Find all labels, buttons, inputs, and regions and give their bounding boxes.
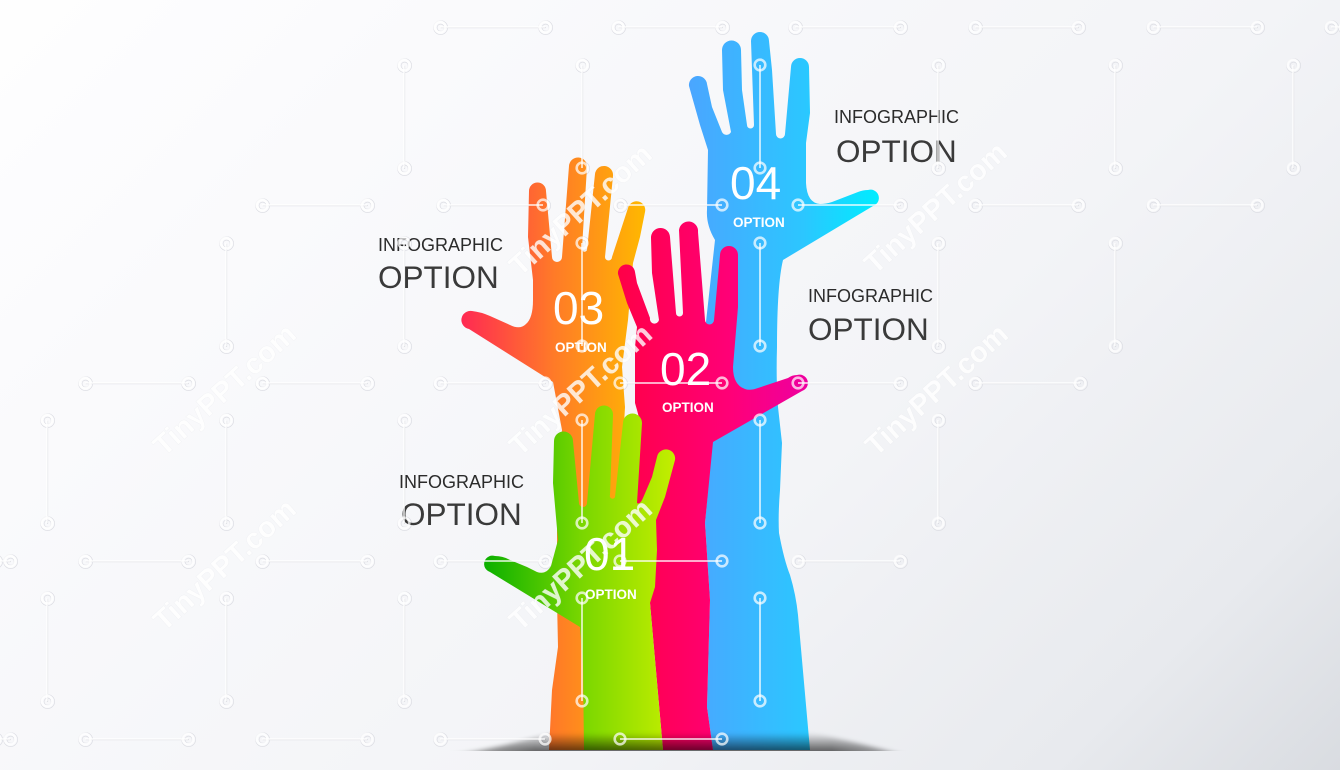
number badge 02: OPTION: [662, 400, 714, 415]
label block: option 02: INFOGRAPHIC: [808, 286, 933, 306]
watermarks: TinyPPT.com: [147, 493, 303, 637]
number badge 03: [553, 282, 607, 355]
label block: option 01: OPTION: [401, 496, 522, 532]
watermarks: TinyPPT.com: [858, 136, 1014, 280]
watermarks: TinyPPT.com: [859, 318, 1015, 462]
watermarks: [147, 136, 1015, 637]
number badge 04: OPTION: [733, 215, 785, 230]
label block: option 04: [834, 107, 959, 169]
label block: option 03: INFOGRAPHIC: [378, 235, 503, 255]
number badge 02: [660, 343, 714, 415]
watermarks: TinyPPT.com: [147, 318, 303, 462]
hand 01: green: [484, 406, 675, 750]
number badge 01: OPTION: [585, 587, 637, 602]
label block: option 04: OPTION: [836, 133, 957, 169]
hand 03: orange: [461, 157, 645, 750]
number badge 02: 02: [660, 343, 711, 395]
label block: option 03: [378, 235, 503, 295]
label block: option 01: [399, 472, 524, 532]
hand 02: pink: [618, 221, 808, 750]
watermarks: TinyPPT.com: [503, 318, 659, 462]
label block: option 02: [808, 286, 933, 347]
number badge 04: 04: [730, 157, 781, 209]
label block: option 01: INFOGRAPHIC: [399, 472, 524, 492]
label block: option 04: INFOGRAPHIC: [834, 107, 959, 127]
ground shadow: [462, 734, 898, 751]
label block: option 02: OPTION: [808, 311, 929, 347]
label block: option 03: OPTION: [378, 259, 499, 295]
watermarks: TinyPPT.com: [503, 138, 659, 282]
number badge 03: 03: [553, 282, 604, 334]
watermarks: TinyPPT.com: [503, 493, 659, 637]
number badge 03: OPTION: [555, 340, 607, 355]
number badge 04: [730, 157, 785, 230]
number badge 01: [584, 528, 637, 602]
hand 04: blue: [689, 32, 879, 750]
number badge 01: 01: [584, 528, 635, 580]
